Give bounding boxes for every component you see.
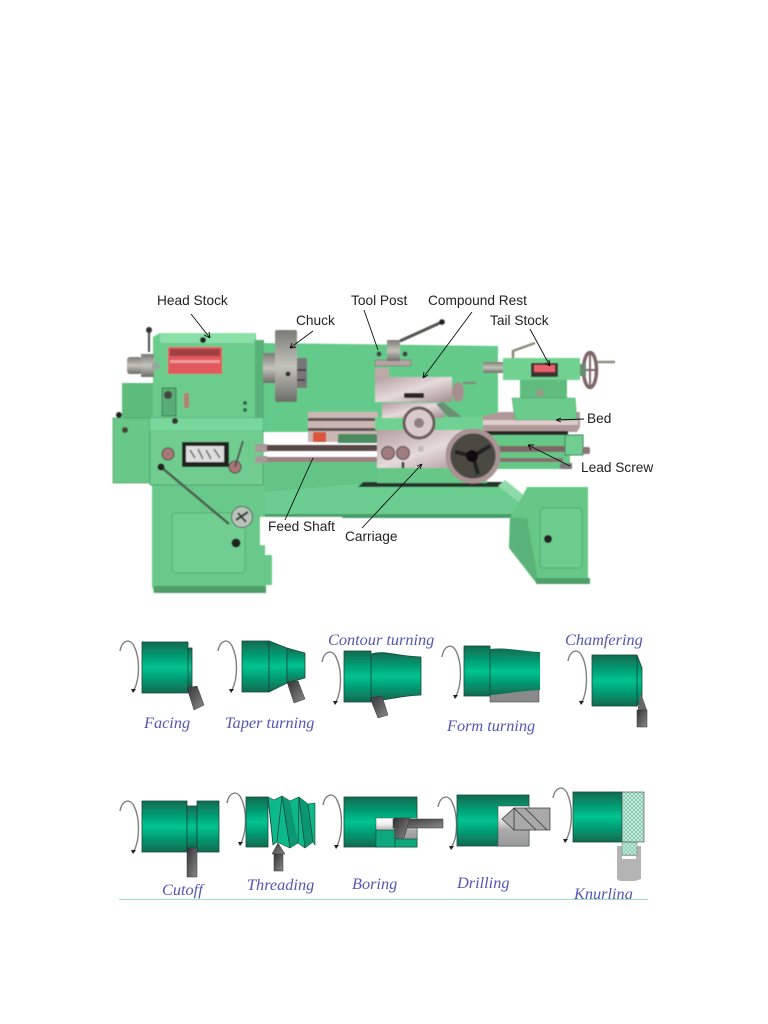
pointer: carriage — [362, 464, 422, 528]
operation: knurling: Knurling — [573, 884, 633, 903]
label: carriage: Carriage — [345, 529, 398, 544]
label: bed: Bed — [587, 411, 611, 426]
label: tail stock: Tail Stock — [490, 313, 549, 328]
operation: taper turning: Taper turning — [225, 713, 314, 732]
cross slide wheel — [382, 402, 462, 438]
baseline rule — [119, 899, 648, 900]
lathe machine illustration — [113, 319, 615, 593]
gear control panel — [150, 418, 263, 485]
bed — [480, 412, 580, 469]
back panel of lathe — [262, 343, 498, 432]
operation: drilling: Drilling — [456, 873, 509, 892]
rear rails behind carriage — [308, 412, 378, 443]
pointer: compound rest — [423, 312, 472, 378]
white label patch: lower carriage — [340, 526, 400, 548]
spindle left pulley — [127, 327, 160, 377]
operation: cutoff — [120, 801, 219, 899]
operation: threading — [227, 793, 315, 894]
pointer: feed shaft — [285, 458, 313, 520]
label: tool post: Tool Post — [351, 293, 407, 308]
tailstock — [483, 343, 580, 420]
pointer: tail stock — [530, 329, 550, 366]
operations: first row — [120, 630, 647, 735]
lead screw right — [495, 435, 590, 484]
operation: taper turning — [218, 641, 314, 732]
operation: contour turning — [322, 630, 434, 718]
right leg with door — [509, 487, 590, 584]
operation: boring — [323, 795, 443, 893]
white label patch: feed shaft — [260, 517, 342, 545]
chip tray — [265, 480, 536, 518]
gearbox left end — [113, 383, 156, 483]
lower bed web — [262, 462, 387, 492]
operation: chamfering — [565, 630, 647, 727]
operation: knurling — [553, 788, 644, 903]
carriage saddle and apron — [375, 417, 487, 486]
pointer: bed — [556, 418, 584, 422]
operation: drilling — [438, 795, 550, 892]
compound rest — [375, 368, 476, 402]
pointer lines for labels — [191, 310, 584, 528]
mask below baseline rule clipping the text — [100, 900, 700, 920]
operation: facing: Facing — [143, 713, 190, 732]
pointer: tool post — [364, 310, 378, 350]
pointer: head stock — [191, 314, 210, 338]
operation: contour turning: Contour turning — [328, 630, 434, 649]
pointer: chuck — [290, 331, 313, 348]
label: head stock: Head Stock — [157, 293, 228, 308]
label: lead screw: Lead Screw — [581, 460, 653, 475]
operation: cutoff: Cutoff — [162, 880, 205, 899]
operation: form turning — [442, 646, 540, 735]
label: chuck: Chuck — [296, 313, 335, 328]
left leg with door — [152, 485, 272, 593]
operation: form turning: Form turning — [446, 716, 535, 735]
operations: second row — [120, 788, 644, 903]
pointer: lead screw — [528, 445, 570, 466]
label: feed shaft: Feed Shaft — [268, 519, 335, 534]
gear lever with dial — [158, 464, 252, 528]
chuck — [263, 330, 307, 402]
operation: facing — [120, 641, 204, 732]
feed shaft and lead screw left — [255, 444, 380, 463]
operation: boring: Boring — [352, 874, 397, 893]
tool post — [375, 319, 445, 366]
tailstock handwheel — [580, 352, 615, 388]
label: compound rest: Compound Rest — [428, 293, 527, 308]
operation: threading: Threading — [247, 875, 314, 894]
headstock — [153, 333, 264, 418]
operation: chamfering: Chamfering — [565, 630, 643, 649]
carriage handwheel — [448, 431, 498, 481]
lathe part labels — [157, 293, 653, 544]
